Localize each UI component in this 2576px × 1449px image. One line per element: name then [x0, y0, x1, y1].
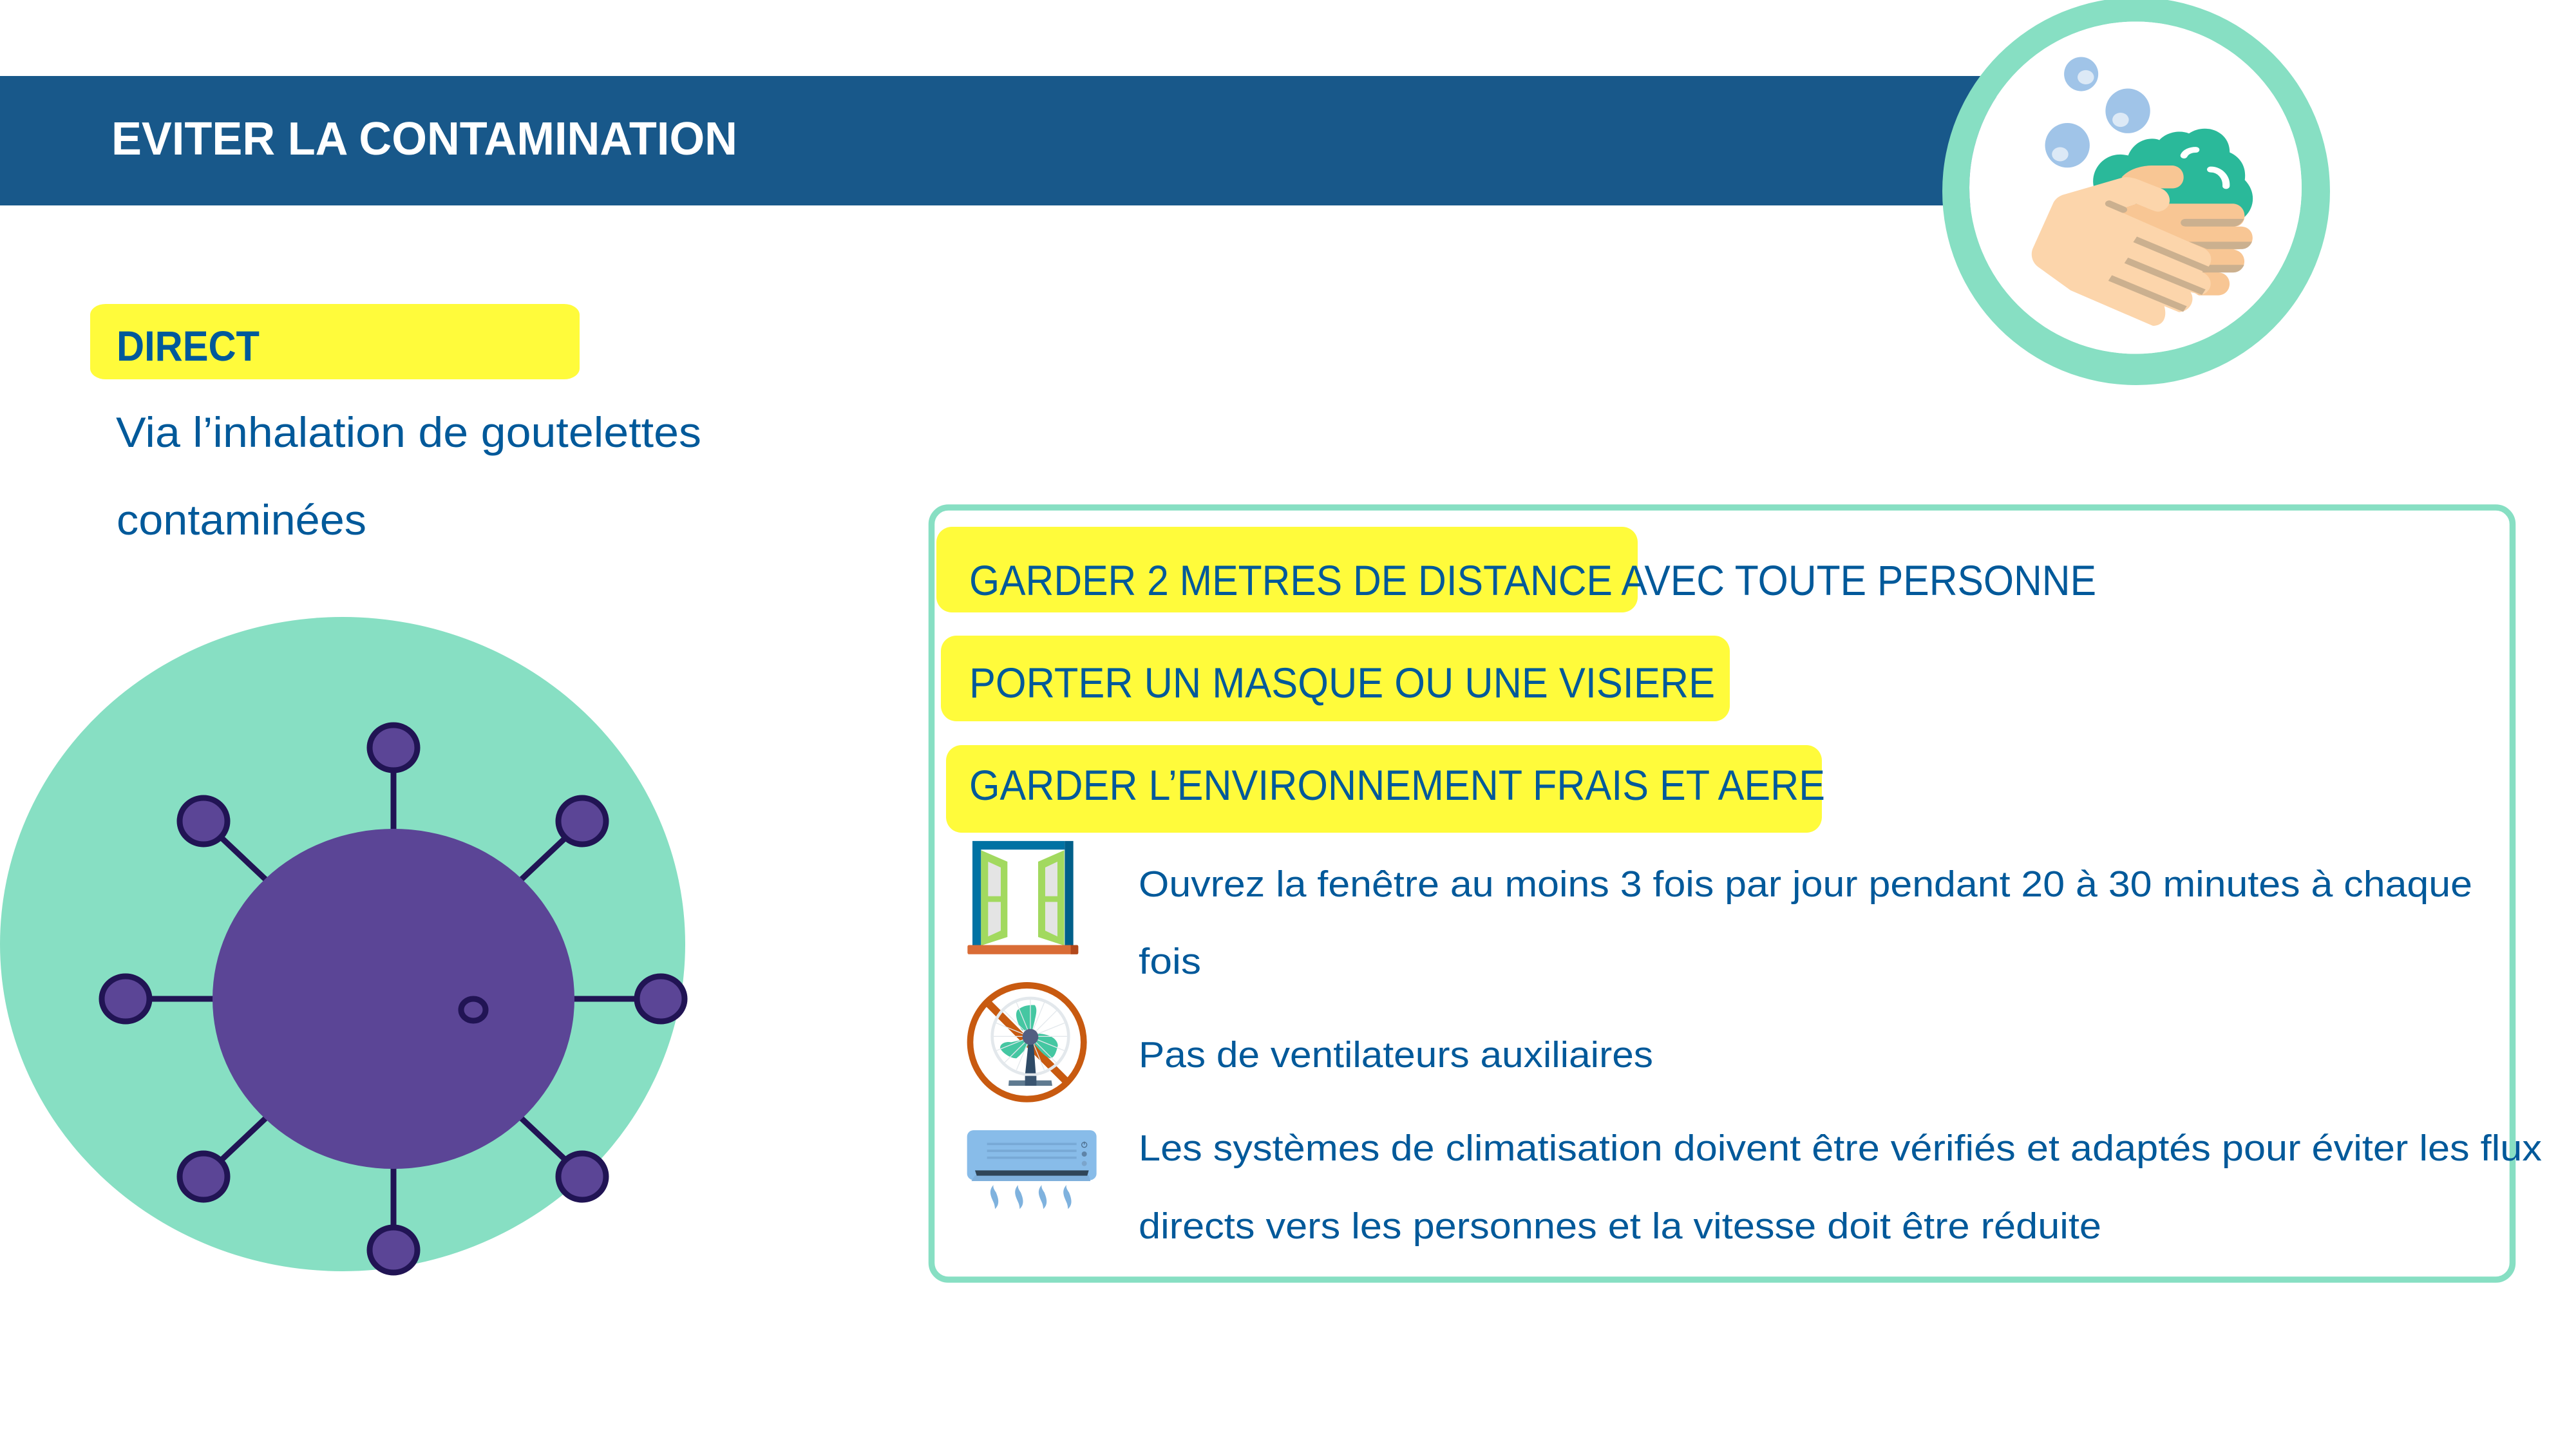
text: open window: fois [1139, 941, 1201, 982]
highlight: direct [90, 304, 580, 379]
icon: air conditioner [967, 1130, 1097, 1209]
text: wear mask: PORTER UN MASQUE OU UNE VISIERE [969, 659, 1715, 706]
highlight: distance [936, 527, 1638, 612]
text: air conditioning: directs vers les personnes et la vitesse doit être réduite [1139, 1206, 2101, 1247]
title: EVITER LA CONTAMINATION [111, 113, 737, 165]
panel: recommendations [931, 507, 2513, 1280]
text: no fans: Pas de ventilateurs auxiliaires [1139, 1034, 1653, 1075]
highlight: fresh air [946, 745, 1822, 833]
text: direct transmission: Via l’inhalation de goutelettes [116, 408, 701, 456]
text: keep environment fresh: GARDER L’ENVIRONNEMENT FRAIS ET AERE [969, 761, 1825, 809]
text: open window: Ouvrez la fenêtre au moins 3 fois par jour pendant 20 à 30 minutes à chaque [1139, 864, 2472, 905]
heading: direct: DIRECT [117, 322, 260, 370]
text: air conditioning: Les systèmes de climatisation doivent être vérifiés et adaptés pour éviter les flux [1139, 1128, 2542, 1169]
icon: hand washing in ring [1942, 0, 2330, 385]
text: keep distance: GARDER 2 METRES DE DISTANCE AVEC TOUTE PERSONNE [969, 556, 2096, 604]
highlight: mask [941, 636, 1730, 721]
icon: open window [967, 841, 1078, 954]
text: air conditioning [1139, 1128, 2542, 1247]
icon: no fan [967, 982, 1087, 1103]
text: direct transmission: contaminées [117, 496, 366, 544]
text: direct transmission [116, 408, 701, 544]
text: open window [1139, 864, 2472, 982]
header bar [0, 76, 1996, 205]
illustration: virus [0, 617, 685, 1273]
